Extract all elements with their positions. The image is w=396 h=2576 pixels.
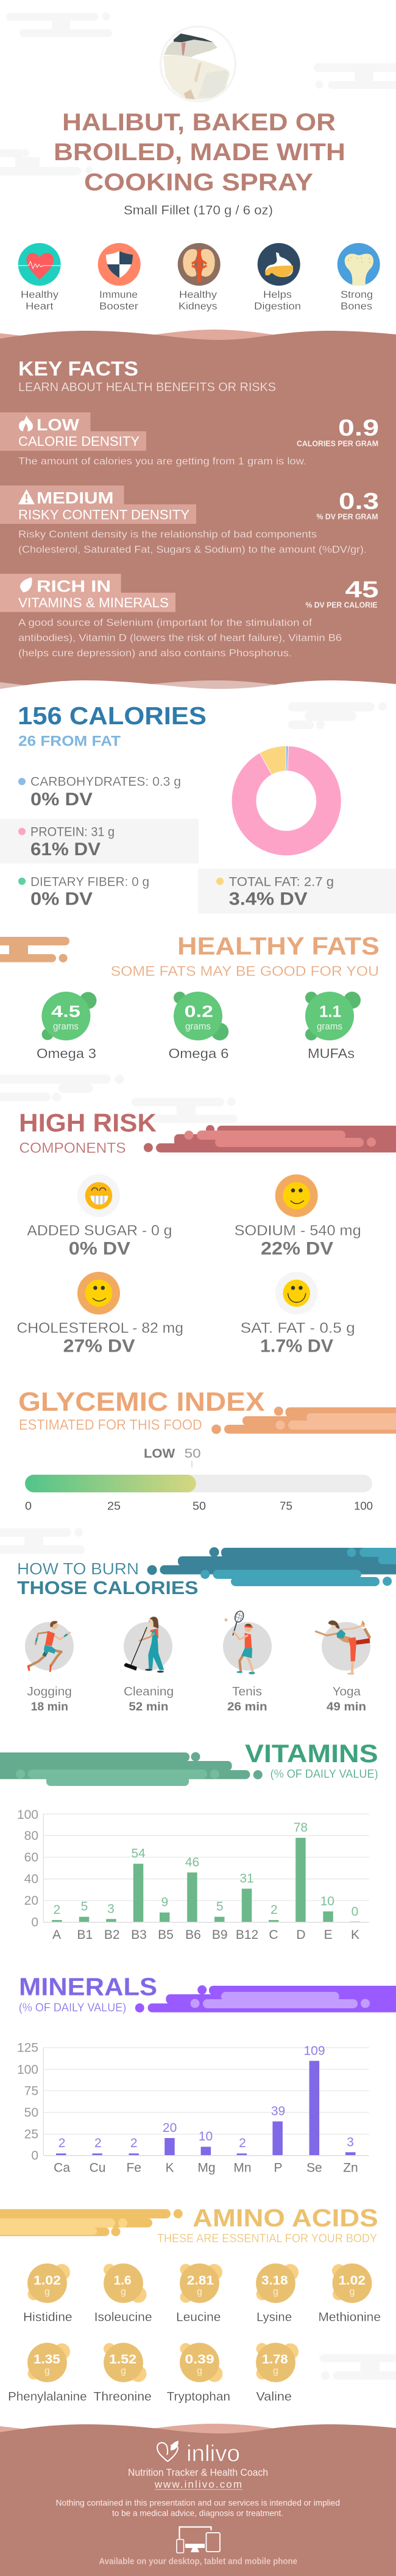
benefit icons row <box>18 243 380 312</box>
icon: healthy kidneys <box>178 243 221 286</box>
amino: leucine <box>176 2264 222 2324</box>
gauge axis: 50 <box>193 1500 206 1512</box>
bar chart: minerals: Zn <box>343 2161 358 2175</box>
icon labels: Helps <box>263 289 292 300</box>
risk item: added sugar: ADDED SUGAR - 0 g <box>27 1223 172 1239</box>
bar chart: vitamins: 31 <box>239 1872 254 1886</box>
amino: tryptophan <box>167 2343 230 2404</box>
bar chart: vitamins: 9 <box>161 1896 168 1910</box>
gauge bar <box>25 1475 372 1492</box>
bar chart: minerals: 2 <box>94 2136 102 2150</box>
amino: histidine: 1.02 <box>34 2274 61 2288</box>
amino: histidine: Histidine <box>23 2311 72 2324</box>
icon: flame <box>19 415 33 431</box>
fact: medium risky content density: RISKY CONTENT DENSITY <box>18 507 189 523</box>
icon: leaf <box>20 577 32 592</box>
macro: carbohydrates: CARBOHYDRATES: 0.3 g <box>30 775 181 789</box>
macro: total fat: 3.4% DV <box>229 889 308 909</box>
icon labels: Healthy <box>21 289 59 300</box>
activity: cleaning: Cleaning <box>124 1685 174 1699</box>
icon: helps digestion <box>258 243 300 286</box>
bar chart: vitamins: B6 <box>185 1928 201 1942</box>
activity: jogging: Jogging <box>27 1685 72 1699</box>
fact: rich in vitamins and minerals: antibodies), Vitamin D (lowers the risk of heart failure), Vitamin B6 <box>18 632 342 643</box>
bar chart: minerals: Se <box>306 2161 322 2175</box>
fact: low calorie density: LOW <box>37 415 80 434</box>
bar chart: vitamins: 5 <box>216 1899 224 1913</box>
icon: healthy heart <box>18 243 61 286</box>
subheading: COMPONENTS <box>19 1140 126 1156</box>
amino: threonine: 1.52 <box>109 2352 136 2366</box>
bar chart: vitamins: 10 <box>320 1894 334 1908</box>
macro: carbohydrates: 0% DV <box>30 789 93 810</box>
icon: immune booster <box>98 243 141 286</box>
decoration: teal pills <box>147 1547 396 1586</box>
bar chart: minerals: 125 <box>17 2041 38 2055</box>
macro: dietary fiber: 0% DV <box>30 889 93 909</box>
panel: amino acids <box>0 2204 381 2404</box>
heading: MINERALS <box>19 1973 157 2001</box>
activity: tennis <box>223 1610 272 1713</box>
bar chart: vitamins: 20 <box>24 1894 38 1908</box>
fact: medium risky content density: (Cholesterol, Saturated Fat, Sugars & Sodium) to the amount (%DV/gr). <box>18 543 367 556</box>
activity: cleaning: 52 min <box>129 1701 168 1713</box>
bar chart: vitamins: D <box>296 1928 306 1942</box>
disclaimer: to be a medical advice, diagnosis or treatment. <box>112 2508 283 2518</box>
amino: valine: 1.78 <box>262 2352 288 2366</box>
amino: lysine: 3.18 <box>261 2274 288 2288</box>
macro: protein <box>0 819 199 864</box>
heading: HIGH RISK <box>19 1109 157 1137</box>
bar chart: minerals: 75 <box>24 2084 38 2098</box>
heading: 156 calories: 156 CALORIES <box>18 702 207 730</box>
logo: inlivo <box>157 2441 240 2467</box>
bar chart: vitamins: B9 <box>212 1928 228 1942</box>
website link: www.inlivo.com <box>154 2479 242 2490</box>
amino: histidine <box>23 2264 72 2324</box>
amino: methionine <box>318 2264 381 2324</box>
risk item: cholesterol <box>16 1272 183 1356</box>
icon: strong bones <box>338 243 380 286</box>
gauge axis <box>25 1500 373 1512</box>
bar chart: vitamins: E <box>324 1928 333 1942</box>
bar chart: minerals: 0 <box>31 2149 38 2163</box>
activity: tennis: Tenis <box>232 1685 262 1699</box>
amino: phenylalanine: Phenylalanine <box>8 2390 87 2404</box>
amino: methionine: Methionine <box>318 2311 381 2324</box>
panel: how to burn those calories: THOSE CALORIES <box>17 1577 199 1598</box>
subheading: (% OF DAILY VALUE) <box>19 2002 126 2014</box>
fact: rich in vitamins and minerals: RICH IN <box>37 577 111 595</box>
amino: histidine: g <box>44 2287 50 2297</box>
bar chart: vitamins: 0 <box>352 1905 358 1919</box>
icon labels: Healthy <box>179 289 217 300</box>
amino: isoleucine: 1.6 <box>114 2274 132 2288</box>
heading: VITAMINS <box>245 1739 378 1768</box>
decoration: red pills <box>144 1125 396 1152</box>
bar chart: minerals: 100 <box>17 2063 38 2077</box>
icon labels: Immune <box>99 289 138 300</box>
title: COOKING SPRAY <box>84 169 313 196</box>
amino: leucine: Leucine <box>176 2311 221 2324</box>
amino: isoleucine <box>94 2264 152 2324</box>
panel: vitamins <box>0 1739 378 1942</box>
bubble: omega 6: 0.2 <box>185 1002 213 1020</box>
amino: methionine: g <box>350 2287 355 2297</box>
gauge axis: 0 <box>25 1500 32 1512</box>
bar chart: minerals: 39 <box>271 2105 285 2119</box>
macro: protein: 61% DV <box>30 839 101 859</box>
amino: threonine <box>93 2343 152 2404</box>
fact: low calorie density: 0.9 <box>338 415 379 441</box>
bar chart: vitamins: B2 <box>104 1928 120 1942</box>
icon labels <box>21 289 373 312</box>
bar chart: minerals: P <box>274 2161 283 2175</box>
bar chart: vitamins: B3 <box>131 1928 147 1942</box>
bubble: mufas: grams <box>317 1022 342 1032</box>
panel: high risk components <box>16 1109 396 1356</box>
amino: isoleucine: g <box>121 2287 126 2297</box>
amino: isoleucine: Isoleucine <box>94 2311 152 2324</box>
amino: lysine: g <box>273 2287 278 2297</box>
activity: yoga: Yoga <box>333 1685 361 1699</box>
bar chart: minerals: 3 <box>347 2135 354 2149</box>
panel: key facts <box>0 330 396 689</box>
decoration: yellow pills <box>0 2209 183 2236</box>
panel: minerals <box>17 1973 396 2175</box>
bar chart: minerals: 25 <box>24 2128 38 2142</box>
bubble: mufas <box>305 992 361 1061</box>
title: BROILED, MADE WITH <box>54 139 345 166</box>
bar chart: vitamins: B1 <box>77 1928 93 1942</box>
disclaimer <box>56 2497 340 2518</box>
panel: healthy fats <box>0 932 380 1061</box>
amino: phenylalanine <box>8 2343 87 2404</box>
panel: glycemic index <box>18 1387 396 1512</box>
bar chart: minerals: Ca <box>54 2161 70 2175</box>
fact: low calorie density: The amount of calories you are getting from 1 gram is low. <box>18 456 306 467</box>
bar chart: vitamins: 40 <box>24 1872 38 1886</box>
icon labels: Heart <box>26 301 54 312</box>
bar chart: vitamins: 60 <box>24 1851 38 1865</box>
risk item: saturated fat: 1.7% DV <box>260 1336 333 1356</box>
icon labels: Booster <box>99 301 139 312</box>
bar chart: vitamins: 2 <box>270 1903 278 1917</box>
fact: rich in vitamins and minerals: A good source of Selenium (important for the stimulation of <box>18 616 312 629</box>
fact: medium risky content density: 0.3 <box>339 489 379 514</box>
tagline: Nutrition Tracker & Health Coach <box>128 2467 268 2478</box>
fact: low calorie density: CALORIES PER GRAM <box>297 439 378 448</box>
activity: yoga <box>316 1620 370 1713</box>
icon: devices <box>177 2527 220 2553</box>
subheading: from fat: 26 FROM FAT <box>18 733 121 750</box>
subheading: LEARN ABOUT HEALTH BENEFITS OR RISKS <box>18 381 276 394</box>
bar chart: minerals: Mg <box>197 2161 216 2175</box>
activity: tennis: 26 min <box>227 1701 267 1713</box>
bar chart: minerals: K <box>166 2161 174 2175</box>
heading: HOW TO BURN <box>17 1559 139 1578</box>
bubble: omega 6: Omega 6 <box>168 1046 229 1061</box>
fact: low calorie density: CALORIE DENSITY <box>18 434 140 449</box>
fact: low calorie density <box>0 412 379 467</box>
bar chart: vitamins: K <box>351 1928 359 1942</box>
title: HALIBUT, BAKED OR <box>62 109 336 136</box>
amino: leucine: 2.81 <box>187 2274 214 2288</box>
risk item: cholesterol: 27% DV <box>63 1336 135 1356</box>
fact: medium risky content density: Risky Content density is the relationship of bad components <box>18 529 317 540</box>
gauge axis: 100 <box>354 1500 373 1512</box>
risk item: added sugar <box>27 1174 172 1258</box>
activity: jogging: 18 min <box>31 1701 68 1713</box>
decoration: purple pills <box>135 1985 396 2013</box>
bar chart: vitamins: 80 <box>24 1829 38 1843</box>
panel: how to burn those calories <box>17 1547 396 1713</box>
fact: rich in vitamins and minerals: VITAMINS & MINERALS <box>18 595 169 610</box>
icon labels: Strong <box>341 289 373 300</box>
gauge value <box>144 1446 201 1467</box>
amino: threonine: Threonine <box>93 2390 152 2404</box>
subheading: ESTIMATED FOR THIS FOOD <box>19 1417 202 1433</box>
donut chart <box>232 746 341 856</box>
heading: AMINO ACIDS <box>193 2204 378 2232</box>
amino: leucine: g <box>197 2287 202 2297</box>
bar chart: vitamins: 3 <box>107 1902 115 1916</box>
bar chart: vitamins: A <box>52 1928 61 1942</box>
amino: valine <box>256 2343 299 2404</box>
heading: key facts: KEY FACTS <box>18 357 138 379</box>
risk item: added sugar: 0% DV <box>69 1238 130 1258</box>
bar chart: vitamins: 2 <box>53 1903 60 1917</box>
macro: total fat <box>198 869 396 914</box>
decoration: orange pills <box>0 937 69 962</box>
fact: rich in vitamins and minerals: (helps cure depression) and also contains Phosphorus. <box>18 647 292 659</box>
bar chart: vitamins: C <box>269 1928 278 1942</box>
amino: tryptophan: g <box>197 2366 202 2376</box>
bubble: omega 6: grams <box>185 1022 211 1032</box>
heading: HEALTHY FATS <box>177 932 380 960</box>
bubble: mufas: 1.1 <box>319 1002 341 1020</box>
subheading: SOME FATS MAY BE GOOD FOR YOU <box>111 963 379 979</box>
risk item: cholesterol: CHOLESTEROL - 82 mg <box>16 1320 183 1336</box>
panel: footer <box>0 2424 396 2576</box>
bubble: omega 3: grams <box>53 1022 79 1032</box>
risk item: saturated fat: SAT. FAT - 0.5 g <box>241 1320 355 1336</box>
icon: warning triangle <box>18 489 35 504</box>
amino: valine: g <box>273 2366 278 2376</box>
activity: jogging <box>25 1621 74 1713</box>
subheading: THESE ARE ESSENTIAL FOR YOUR BODY <box>157 2232 377 2245</box>
macro: dietary fiber <box>18 875 149 909</box>
bar chart: vitamins <box>17 1808 369 1942</box>
title <box>54 109 345 196</box>
fact: rich in vitamins and minerals: 45 <box>345 577 379 602</box>
amino: tryptophan: Tryptophan <box>167 2390 230 2404</box>
disclaimer: Nothing contained in this presentation and our services is intended or implied <box>56 2497 340 2507</box>
amino: phenylalanine: g <box>44 2366 50 2376</box>
bubble: omega 6 <box>168 992 229 1061</box>
amino: tryptophan: 0.39 <box>185 2352 214 2366</box>
bar chart: minerals: 10 <box>199 2130 213 2144</box>
bar chart: vitamins: 46 <box>185 1855 199 1869</box>
fact: rich in vitamins and minerals <box>0 574 379 659</box>
bar chart: vitamins: 5 <box>81 1899 88 1913</box>
heading: GLYCEMIC INDEX <box>18 1387 264 1417</box>
bar chart: minerals: 2 <box>130 2136 138 2150</box>
gauge value: LOW <box>144 1446 175 1461</box>
bar chart: vitamins: 0 <box>31 1916 38 1930</box>
bar chart: minerals: Fe <box>126 2161 141 2175</box>
amino: methionine: 1.02 <box>339 2274 366 2288</box>
logo: inlivo: inlivo <box>186 2441 240 2467</box>
amino: lysine <box>256 2264 299 2324</box>
risk item: sodium: SODIUM - 540 mg <box>235 1223 361 1239</box>
amino: phenylalanine: 1.35 <box>34 2352 60 2366</box>
icon labels: Bones <box>341 301 372 312</box>
bar chart: vitamins: B12 <box>236 1928 258 1942</box>
amino: valine: Valine <box>256 2390 292 2404</box>
risk item: sodium <box>235 1174 361 1258</box>
fact: medium risky content density: MEDIUM <box>37 489 113 507</box>
macro: total fat: TOTAL FAT: 2.7 g <box>229 875 334 889</box>
amino: lysine: Lysine <box>256 2311 292 2324</box>
fact: rich in vitamins and minerals: % DV PER CALORIE <box>306 601 378 609</box>
bar chart: minerals: 2 <box>58 2136 65 2150</box>
macro: protein: PROTEIN: 31 g <box>30 825 115 839</box>
bar chart: minerals: 2 <box>239 2136 246 2150</box>
decoration: orange pills <box>211 1406 396 1434</box>
bubble: omega 3: Omega 3 <box>37 1046 96 1061</box>
availability note: Available on your desktop, tablet and mobile phone <box>99 2556 297 2566</box>
bar chart: vitamins: B5 <box>158 1928 174 1942</box>
panel: calories <box>0 702 396 914</box>
bubble: omega 3: 4.5 <box>51 1002 80 1020</box>
serving size subtitle: Small Fillet (170 g / 6 oz) <box>124 203 273 217</box>
bar chart: minerals: 20 <box>163 2121 177 2135</box>
bubble: mufas: MUFAs <box>308 1046 355 1061</box>
bar chart: minerals: Cu <box>90 2161 105 2175</box>
activity: yoga: 49 min <box>327 1701 366 1713</box>
decoration: green pills <box>0 1752 263 1786</box>
bar chart: minerals <box>17 2041 369 2175</box>
macro: carbohydrates <box>18 775 181 810</box>
gauge axis: 25 <box>107 1500 121 1512</box>
bar chart: minerals: 109 <box>303 2044 325 2058</box>
activity: cleaning <box>124 1617 174 1713</box>
fact: medium risky content density: % DV PER GRAM <box>317 512 378 521</box>
bar chart: vitamins: 54 <box>131 1847 146 1861</box>
gauge value: 50 <box>185 1446 201 1461</box>
food photo: halibut fillet <box>161 27 235 101</box>
bubble: omega 3 <box>37 992 96 1061</box>
risk item: sodium: 22% DV <box>261 1238 333 1258</box>
bar chart: vitamins: 100 <box>17 1808 38 1822</box>
bar chart: minerals: 50 <box>24 2106 38 2120</box>
amino: threonine: g <box>121 2366 126 2376</box>
fact: medium risky content density <box>0 485 379 556</box>
risk item: saturated fat <box>241 1272 355 1356</box>
macro: dietary fiber: DIETARY FIBER: 0 g <box>30 875 149 889</box>
subheading: (% OF DAILY VALUE) <box>270 1768 378 1781</box>
gauge axis: 75 <box>280 1500 292 1512</box>
icon labels: Kidneys <box>179 301 217 312</box>
bar chart: vitamins: 78 <box>294 1821 308 1835</box>
bar chart: minerals: Mn <box>233 2161 252 2175</box>
icon labels: Digestion <box>254 301 301 312</box>
